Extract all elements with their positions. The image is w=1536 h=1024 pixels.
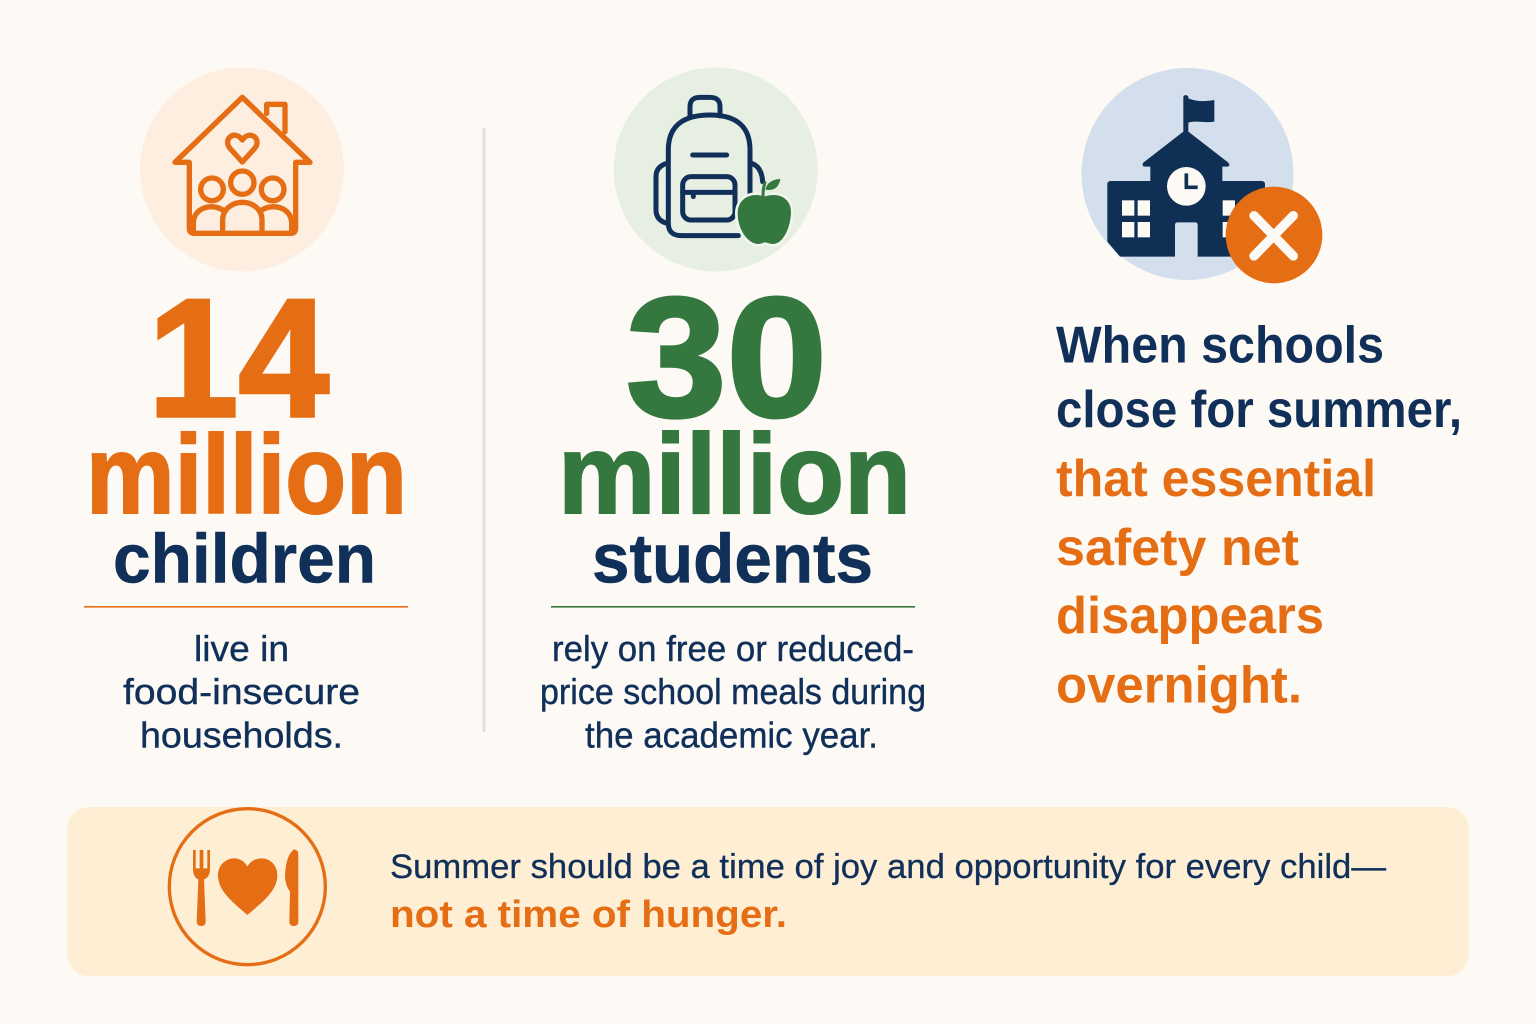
panel: schools close [1056,68,1462,714]
icon: house with family [140,68,344,272]
heading: when schools close for summer [1056,316,1462,439]
description: rely on free or reduced-price school meals [540,628,926,756]
heading: that essential safety net disappears overnight: that essential [1056,450,1376,508]
heading: when schools close for summer: close for summer, [1056,381,1462,439]
description: live in food-insecure households: food-insecure [123,671,360,712]
word students: students [592,520,873,598]
description: rely on free or reduced-price school meals: the academic year. [585,714,878,756]
heading: that essential safety net disappears overnight: overnight. [1056,656,1302,714]
description: live in food-insecure households: live in [194,628,289,669]
icon: closed school [1082,68,1322,283]
icon: backpack with apple [614,68,818,272]
word million: million [86,413,407,537]
big number 14: 14 [148,264,329,452]
word children: children [113,520,376,598]
heading: that essential safety net disappears overnight [1056,450,1376,714]
big number 30: 30 [626,263,827,453]
icon: plate with heart, fork and knife [169,809,325,965]
banner text line 2: not a time of hunger. [390,894,787,936]
description: rely on free or reduced-price school meals: rely on free or reduced- [552,628,914,669]
panel: children statistic [84,68,408,756]
heading: when schools close for summer: When schools [1056,316,1384,374]
heading: that essential safety net disappears overnight: safety net [1056,519,1299,577]
description: live in food-insecure households [123,628,360,756]
description: rely on free or reduced-price school meals: price school meals during [540,671,926,712]
banner: closing message [67,807,1469,976]
panel: students statistic [540,68,926,756]
heading: that essential safety net disappears overnight: disappears [1056,587,1324,645]
description: live in food-insecure households: households. [140,714,343,756]
word million: million [558,411,911,537]
banner text line 1: Summer should be a time of joy and opportunity for every child— [390,848,1386,886]
